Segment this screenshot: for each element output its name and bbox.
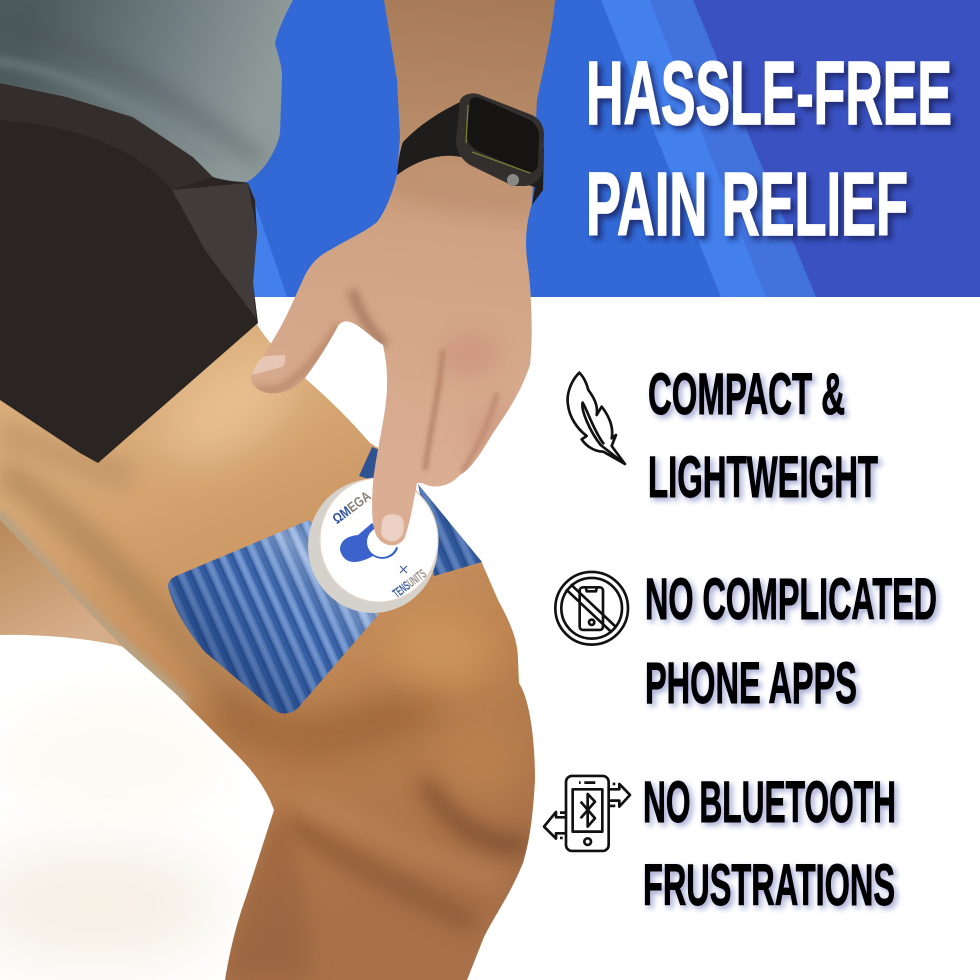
tape: electrode pad (168, 447, 482, 713)
text: compact and lightweight (648, 362, 878, 510)
person: rear leg (0, 495, 135, 650)
icon: feather (568, 373, 625, 464)
device: blue button (340, 523, 398, 562)
person: grey shirt (0, 0, 293, 182)
text: no bluetooth frustrations (643, 770, 896, 918)
icon: phone with bluetooth and arrows (544, 776, 630, 851)
device: white TENS unit (308, 478, 438, 613)
banner: blue header panel (240, 0, 980, 297)
person: forearm and hand (251, 0, 555, 545)
person: dark shorts (0, 83, 258, 463)
device: small cross mark (400, 566, 407, 573)
device: Omega logo: ΩMEGA (329, 488, 374, 527)
person: front leg and knee (0, 310, 535, 980)
person: fingernails (252, 355, 285, 375)
floor shading (0, 700, 225, 960)
device: TENS Units logo: TENSUNITS (390, 566, 429, 601)
text: no complicated phone apps (645, 567, 937, 716)
watch: black strap and case (397, 93, 544, 205)
title (586, 44, 952, 255)
icon: no phone (555, 572, 628, 645)
